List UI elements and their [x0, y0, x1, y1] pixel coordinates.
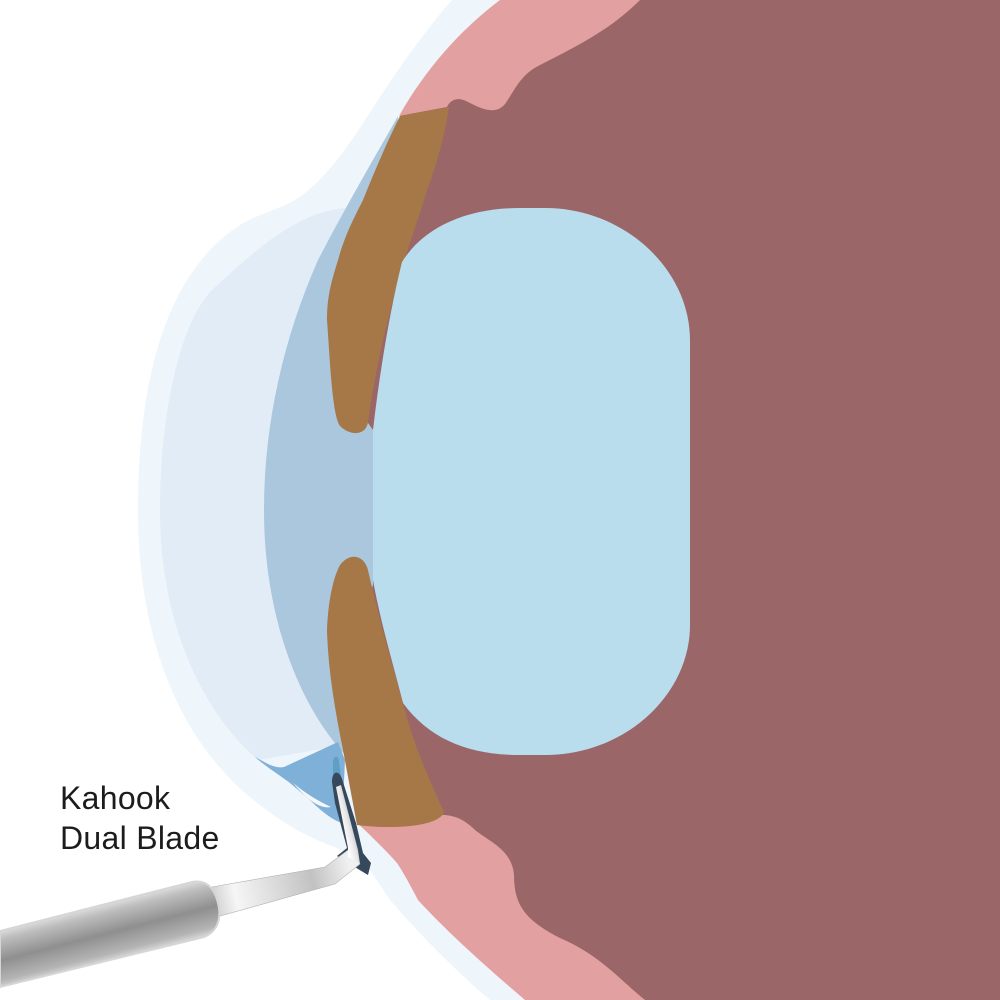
lower sclera tissue: [357, 815, 645, 1000]
lower iris and ciliary body: [327, 557, 444, 827]
vitreous body: [366, 0, 1000, 1000]
lens: [373, 208, 690, 755]
handle: [0, 882, 219, 987]
white crescent highlight: [293, 783, 331, 807]
instrument: Kahook Dual Blade: [0, 773, 371, 987]
upper iris and ciliary body: [327, 107, 449, 433]
label: Dual Blade: [60, 820, 220, 856]
shaft: [212, 850, 360, 916]
dark blade: [332, 773, 371, 875]
anterior chamber: [264, 116, 398, 755]
label: Kahook: [60, 780, 171, 816]
trabecular meshwork angle: [255, 742, 345, 823]
sclera outer membrane: [138, 0, 700, 1000]
upper sclera tissue: [399, 0, 640, 116]
cornea: [160, 208, 380, 760]
blade shank: [336, 785, 360, 864]
schlemm canal mark: [333, 757, 341, 776]
